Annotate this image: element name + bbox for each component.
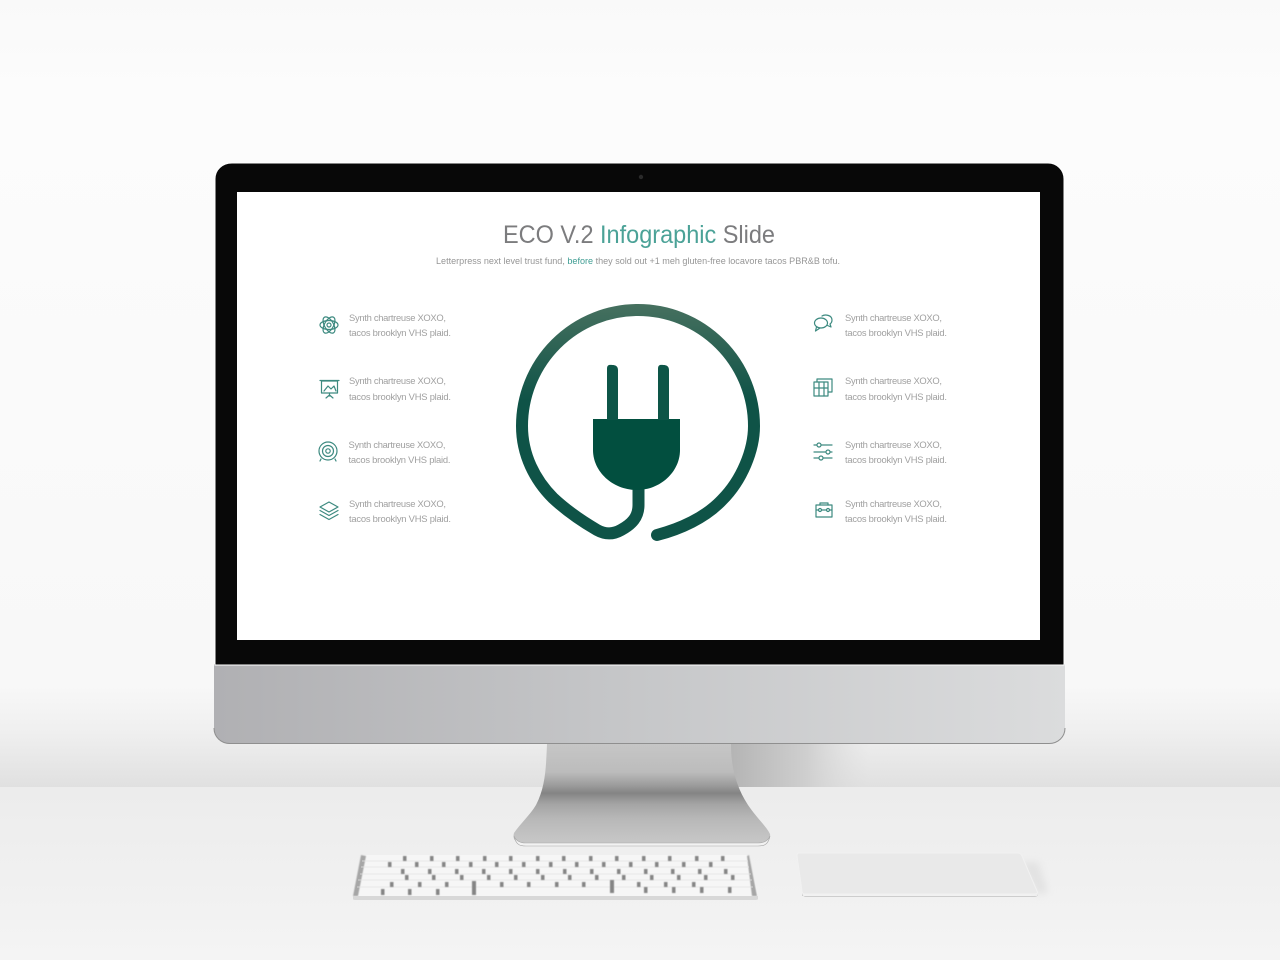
trackpad front edge bbox=[802, 893, 1038, 897]
subtitle: Letterpress next level trust fund, before they sold out +1 meh gluten-free locavore tacos PBR&B tofu. bbox=[436, 256, 840, 266]
left feature list bbox=[319, 312, 451, 524]
feature: presentation bbox=[320, 375, 451, 402]
feature text: tacos brooklyn VHS plaid. bbox=[349, 513, 451, 524]
screen bbox=[237, 192, 1040, 640]
icon: layers bbox=[320, 502, 338, 520]
icon: atom bbox=[320, 315, 338, 335]
feature text: tacos brooklyn VHS plaid. bbox=[348, 454, 450, 465]
feature: chat bbox=[814, 312, 947, 338]
feature text: tacos brooklyn VHS plaid. bbox=[845, 454, 947, 465]
monitor chin bbox=[214, 664, 1065, 744]
icon: stacked grid bbox=[814, 379, 832, 396]
webcam bbox=[639, 175, 643, 179]
trackpad top bbox=[797, 853, 1037, 894]
feature text: tacos brooklyn VHS plaid. bbox=[845, 391, 947, 402]
keyboard bbox=[353, 855, 758, 900]
plug body bbox=[593, 419, 680, 490]
shadow behind stand bbox=[730, 744, 870, 787]
icon: speech bubbles bbox=[814, 315, 832, 331]
cord bbox=[522, 310, 754, 535]
icon: presentation board bbox=[320, 380, 339, 398]
icon: power plug with circular cord bbox=[522, 310, 754, 535]
feature text: Synth chartreuse XOXO, bbox=[349, 375, 446, 386]
feature text: Synth chartreuse XOXO, bbox=[845, 312, 942, 323]
feature: grid layers bbox=[814, 375, 947, 402]
feature text: tacos brooklyn VHS plaid. bbox=[845, 513, 947, 524]
feature: target bbox=[319, 439, 450, 465]
icon: briefcase bbox=[816, 503, 832, 517]
icon: sliders bbox=[814, 443, 832, 460]
feature text: tacos brooklyn VHS plaid. bbox=[349, 391, 451, 402]
chin lower edge bbox=[214, 728, 1065, 744]
right prong bbox=[658, 365, 669, 420]
icon: target bbox=[319, 442, 337, 461]
right feature list bbox=[814, 312, 947, 524]
desktop computer bbox=[214, 163, 1065, 846]
feature text: Synth chartreuse XOXO, bbox=[349, 498, 446, 509]
left prong bbox=[607, 365, 618, 420]
feature text: Synth chartreuse XOXO, bbox=[845, 375, 942, 386]
feature: briefcase bbox=[816, 498, 947, 524]
feature: sliders bbox=[814, 439, 947, 465]
feature: atom bbox=[320, 312, 451, 338]
monitor stand bbox=[513, 744, 770, 846]
feature text: Synth chartreuse XOXO, bbox=[845, 498, 942, 509]
feature text: Synth chartreuse XOXO, bbox=[349, 312, 446, 323]
feature text: tacos brooklyn VHS plaid. bbox=[349, 327, 451, 338]
desk surface bbox=[0, 787, 1280, 960]
trackpad shadow bbox=[1020, 862, 1048, 895]
feature text: tacos brooklyn VHS plaid. bbox=[845, 327, 947, 338]
trackpad bbox=[797, 853, 1048, 897]
feature: layers bbox=[320, 498, 451, 524]
feature text: Synth chartreuse XOXO, bbox=[348, 439, 446, 450]
title: ECO V.2 Infographic Slide bbox=[503, 221, 775, 249]
monitor bezel bbox=[215, 163, 1064, 665]
feature text: Synth chartreuse XOXO, bbox=[845, 439, 942, 450]
